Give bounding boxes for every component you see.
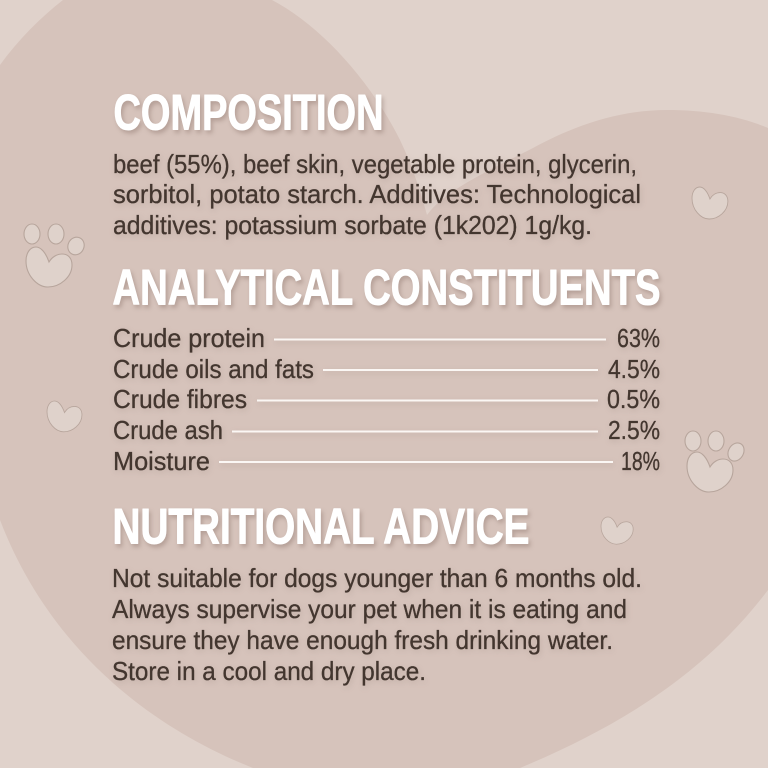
text block: composition: beef (55%), beef skin, vegetable protein, glycerin, <box>113 149 637 179</box>
icon: paw left <box>24 224 87 287</box>
row: crude fibres: Crude fibres <box>113 384 247 414</box>
row: crude ash: 2.5% <box>608 415 660 445</box>
text block: nutritional advice: Always supervise your pet when it is eating and <box>112 594 627 624</box>
text block: nutritional advice: Not suitable for dogs younger than 6 months old. <box>112 563 642 593</box>
text block: nutritional advice: ensure they have enough fresh drinking water. <box>112 625 613 655</box>
icon: heart lower right <box>601 517 633 544</box>
icon: heart left <box>47 401 82 432</box>
text block: composition: additives: potassium sorbate (1k202) 1g/kg. <box>113 210 592 240</box>
row: moisture: 18% <box>621 446 660 476</box>
row: crude protein <box>113 323 660 353</box>
icon: paw right <box>685 431 747 492</box>
row: crude protein: Crude protein <box>113 323 265 353</box>
row: crude oils and fats <box>113 354 660 384</box>
icon: heart top right <box>692 187 728 219</box>
heading: nutritional advice: NUTRITIONAL ADVICE <box>112 498 530 554</box>
table: analytical constituents <box>113 323 660 476</box>
row: crude protein: 63% <box>617 323 660 353</box>
heading: composition: COMPOSITION <box>114 84 384 140</box>
row: crude ash <box>113 415 660 445</box>
text block: composition: sorbitol, potato starch. Additives: Technological <box>113 179 641 209</box>
text block: nutritional advice <box>112 563 642 686</box>
row: crude oils and fats: Crude oils and fats <box>113 354 314 384</box>
row: crude fibres: 0.5% <box>607 384 660 414</box>
row: crude oils and fats: 4.5% <box>608 354 660 384</box>
text block: composition <box>113 149 641 240</box>
row: moisture: Moisture <box>113 446 210 476</box>
row: moisture <box>113 446 660 476</box>
row: crude ash: Crude ash <box>113 415 223 445</box>
row: crude fibres <box>113 384 660 414</box>
text block: nutritional advice: Store in a cool and dry place. <box>112 656 426 686</box>
